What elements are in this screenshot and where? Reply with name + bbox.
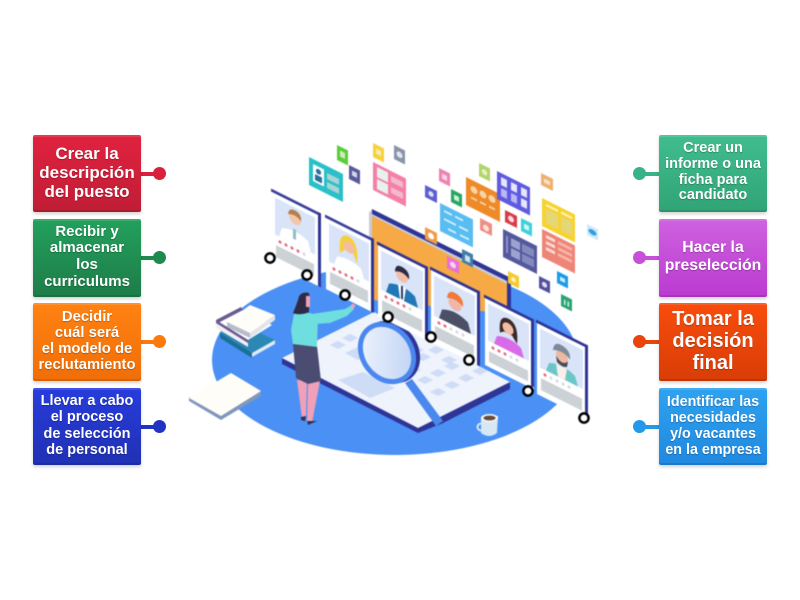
- card: candidate 3: [377, 242, 428, 341]
- label: Recibir y almacenar los curriculums: los: [76, 256, 98, 273]
- trackpad: [338, 372, 395, 398]
- candidate cards: [271, 188, 588, 420]
- icon: green tile: [337, 145, 348, 166]
- label: Recibir y almacenar los curriculums: Recibir y: [55, 223, 119, 240]
- connector: light blue: [633, 420, 659, 433]
- label: Hacer la preselección: [659, 219, 767, 297]
- label: Crear un informe o una ficha para candidato: ficha para: [679, 172, 747, 188]
- keyboard keys: [330, 334, 488, 396]
- card: candidate 1: [271, 188, 321, 288]
- icon: purple tile: [349, 165, 360, 184]
- label: Recibir y almacenar los curriculums: curriculums: [44, 273, 130, 290]
- card: candidate 2: [325, 214, 374, 313]
- legs: [297, 380, 307, 418]
- coffee cup: [478, 414, 498, 436]
- icon: orange card: [466, 177, 500, 222]
- label: Decidir cuál será el modelo de reclutamiento: cuál será: [55, 325, 119, 341]
- face: [306, 296, 310, 307]
- icon: light blue card: [440, 203, 473, 248]
- icon: lime tile: [479, 163, 490, 182]
- icon: dark purple tile: [539, 276, 550, 294]
- label: Identificar las necesidades y/o vacantes en la empresa: en la empresa: [665, 442, 761, 458]
- card: candidate 4: [430, 266, 480, 366]
- hair: [293, 292, 309, 314]
- label: Identificar las necesidades y/o vacantes en la empresa: y/o vacantes: [670, 426, 756, 442]
- connector: green: [141, 251, 166, 264]
- icon: pink panel tile: [447, 256, 459, 274]
- icon: clock tile: [425, 227, 437, 245]
- orange back panel: [369, 209, 511, 320]
- icon: green tile 2: [451, 189, 462, 208]
- label: Crear un informe o una ficha para candidato: [659, 135, 767, 212]
- label: Tomar la decisión final: decisión: [672, 330, 754, 352]
- label: Identificar las necesidades y/o vacantes en la empresa: Identificar las: [667, 394, 759, 410]
- icons over panel: [425, 227, 572, 312]
- label: Recibir y almacenar los curriculums: almacenar: [50, 239, 124, 256]
- label: Decidir cuál será el modelo de reclutamiento: Decidir: [62, 309, 112, 325]
- label: Crear un informe o una ficha para candidato: informe o una: [665, 156, 761, 172]
- connector: blue: [141, 420, 166, 433]
- connector: red: [141, 167, 166, 180]
- icon: thumbs up tile: [462, 249, 473, 268]
- connector: orange: [141, 335, 166, 348]
- label: Crear la descripción del puesto: Crear la: [55, 144, 119, 163]
- laptop: [282, 312, 510, 433]
- icon: grey tile: [394, 145, 405, 164]
- icon: pink tile: [439, 168, 450, 186]
- label: Crear la descripción del puesto: descripción: [39, 163, 135, 182]
- magnifying glass: [346, 309, 443, 426]
- label: Llevar a cabo el proceso de selección de personal: de selección: [43, 426, 131, 442]
- connector: teal: [633, 167, 659, 180]
- icon: pink card: [373, 162, 406, 206]
- label: Recibir y almacenar los curriculums: [33, 219, 141, 297]
- icon: teal profile card: [309, 157, 343, 202]
- label: Identificar las necesidades y/o vacantes en la empresa: [659, 388, 767, 465]
- skirt: [293, 344, 321, 384]
- icon: cyan tile: [521, 218, 532, 236]
- label: Llevar a cabo el proceso de selección de personal: Llevar a cabo: [41, 393, 133, 409]
- connector: red orange: [633, 335, 659, 348]
- connector: purple: [633, 251, 659, 264]
- arm: [312, 305, 354, 324]
- icon: tan tile: [541, 173, 553, 191]
- label: Crear la descripción del puesto: del puesto: [44, 182, 130, 201]
- icon: slate card: [503, 229, 537, 274]
- label: Crear un informe o una ficha para candidato: Crear un: [683, 140, 743, 156]
- icon: violet tile: [425, 185, 437, 203]
- icon: yellow tile: [373, 143, 384, 162]
- label: Llevar a cabo el proceso de selección de personal: de personal: [46, 442, 128, 458]
- icon: blue tile: [557, 271, 568, 288]
- floating icons: [309, 143, 598, 274]
- icon: cloud tile: [587, 224, 598, 240]
- card: candidate 5: [484, 294, 534, 390]
- icon: indigo card: [497, 171, 530, 216]
- label: Llevar a cabo el proceso de selección de personal: [33, 388, 141, 465]
- label: Crear un informe o una ficha para candidato: candidato: [679, 187, 747, 203]
- label: Crear la descripción del puesto: [33, 135, 141, 212]
- icon: salmon card: [542, 229, 575, 274]
- label: Tomar la decisión final: final: [692, 352, 734, 374]
- label: Decidir cuál será el modelo de reclutamiento: [33, 303, 141, 381]
- icon: yellow card: [542, 198, 575, 242]
- open book: [189, 373, 261, 420]
- label target markers: [265, 253, 589, 423]
- label: Hacer la preselección: preselección: [665, 257, 761, 274]
- icon: red heart tile: [505, 210, 517, 228]
- icon: bars tile: [561, 294, 572, 312]
- icon: yellow panel tile: [508, 271, 519, 288]
- card: candidate 6: [536, 320, 588, 420]
- book stack: [216, 305, 275, 358]
- shoes: [301, 416, 306, 421]
- label: Decidir cuál será el modelo de reclutamiento: reclutamiento: [38, 357, 136, 373]
- label: Hacer la preselección: Hacer la: [682, 239, 744, 256]
- icon: peach tile: [480, 218, 492, 236]
- label: Llevar a cabo el proceso de selección de personal: el proceso: [51, 409, 123, 425]
- label: Decidir cuál será el modelo de reclutamiento: el modelo de: [42, 341, 132, 357]
- blue ellipse platform: [212, 265, 578, 455]
- label: Tomar la decisión final: [659, 303, 767, 381]
- label: Tomar la decisión final: Tomar la: [672, 308, 754, 330]
- torso: [291, 313, 318, 347]
- label: Identificar las necesidades y/o vacantes en la empresa: necesidades: [670, 410, 756, 426]
- woman figure: [291, 292, 355, 425]
